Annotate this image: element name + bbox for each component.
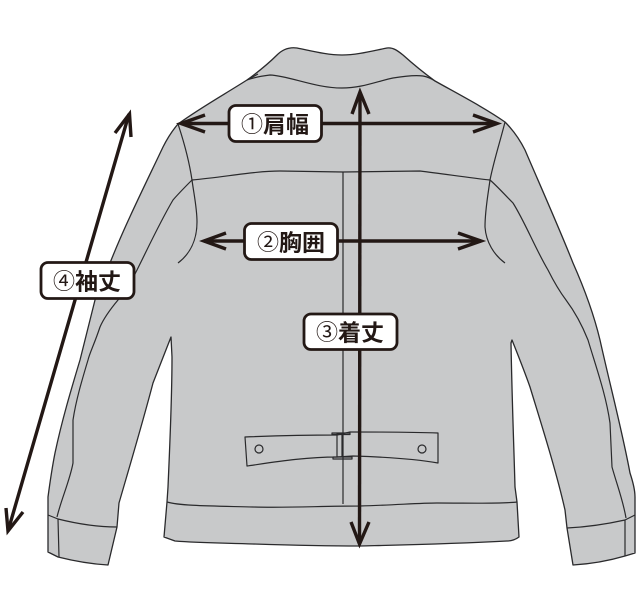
- jacket illustration: [48, 48, 635, 565]
- label: sleeve length: ④: [53, 269, 75, 294]
- center back seam: [342, 172, 344, 504]
- left armhole seam: [178, 124, 197, 263]
- left sleeve seam: [57, 180, 192, 517]
- left cuff: [48, 515, 117, 557]
- label: chest: 胸囲: [279, 230, 325, 256]
- right sleeve seam: [490, 180, 626, 518]
- collar corner left: [247, 74, 258, 80]
- label: shoulder width: 肩幅: [263, 112, 309, 138]
- arrow: shoulder width: [181, 115, 497, 132]
- label: sleeve length: [41, 262, 134, 298]
- label: sleeve length: 袖丈: [75, 268, 121, 294]
- label: chest: ②: [257, 230, 279, 255]
- label: body length: ③: [316, 320, 338, 345]
- label: chest: [244, 224, 338, 260]
- back belt: [245, 432, 438, 466]
- arrow: body length: [351, 92, 369, 544]
- right cuff: [567, 515, 635, 556]
- label: body length: [304, 314, 397, 350]
- hem rib seam: [167, 502, 517, 507]
- jacket silhouette: [48, 48, 635, 565]
- label: shoulder width: [229, 106, 322, 142]
- belt hole left: [255, 445, 263, 453]
- right armhole seam: [485, 122, 505, 263]
- collar seam: [247, 75, 435, 88]
- label: shoulder width: ①: [241, 112, 263, 137]
- belt hole right: [418, 445, 426, 453]
- belt buckle: [332, 433, 352, 459]
- arrow: chest: [204, 233, 481, 249]
- label: body length: 着丈: [338, 320, 384, 346]
- yoke seam: [192, 171, 490, 180]
- arrow: sleeve length: [6, 114, 131, 531]
